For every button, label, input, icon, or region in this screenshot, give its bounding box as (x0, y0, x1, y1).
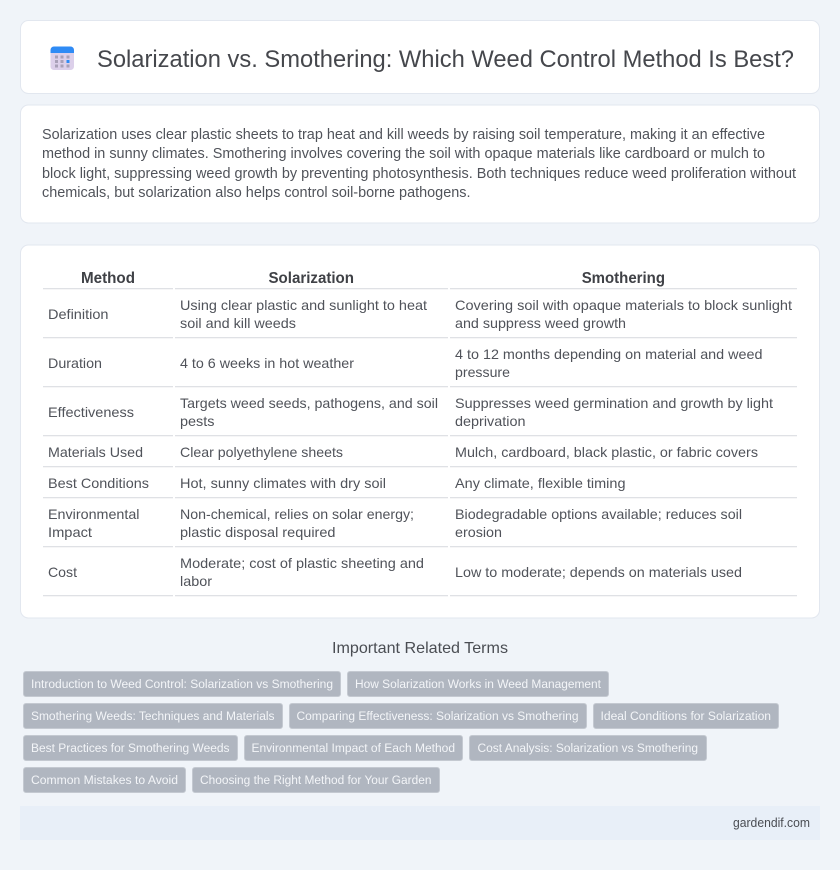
related terms tags (24, 672, 778, 792)
tag (290, 704, 586, 728)
row: environmental impact: Impact (48, 524, 92, 540)
row: environmental impact: plastic disposal required (180, 524, 336, 540)
row: best conditions (43, 475, 797, 498)
row: effectiveness: deprivation (455, 413, 526, 429)
row: duration: pressure (455, 364, 510, 380)
row: materials used: Mulch, cardboard, black plastic, or fabric covers (455, 444, 758, 460)
footer band (20, 806, 820, 840)
tag: Introduction to Weed Control: Solarization vs Smothering (31, 677, 333, 691)
tag (24, 672, 340, 696)
row: cost: Moderate; cost of plastic sheeting and (180, 555, 424, 571)
row: definition: soil and kill weeds (180, 315, 296, 331)
tag: Choosing the Right Method for Your Garden (200, 773, 432, 787)
tag (594, 704, 778, 728)
tag (470, 736, 706, 760)
row: effectiveness: Effectiveness (48, 404, 134, 420)
intro paragraph: chemicals, but solarization also helps control soil-borne pathogens. (42, 185, 470, 201)
row: environmental impact: erosion (455, 524, 502, 540)
tag: Best Practices for Smothering Weeds (31, 741, 230, 755)
tag: Common Mistakes to Avoid (31, 773, 178, 787)
row: best conditions: Best Conditions (48, 475, 149, 491)
icon: calendar (50, 46, 74, 70)
row: duration (43, 346, 797, 387)
tag (24, 704, 282, 728)
tag: Environmental Impact of Each Method (252, 741, 455, 755)
table header row: Solarization (268, 270, 354, 287)
row: cost: labor (180, 573, 212, 589)
row: definition (43, 297, 797, 338)
row: duration: Duration (48, 355, 102, 371)
intro paragraph: Solarization uses clear plastic sheets to trap heat and kill weeds by raising soil temperature, making it an effective (42, 127, 765, 143)
row: duration: 4 to 12 months depending on material and weed (455, 346, 762, 362)
row: materials used (43, 444, 797, 467)
panel: comparison table (20, 245, 820, 618)
row: environmental impact: Environmental (48, 506, 140, 522)
panel: title header (20, 20, 820, 94)
tag (192, 768, 440, 792)
footer source: gardendif.com (733, 815, 810, 830)
row: definition: Using clear plastic and sunlight to heat (180, 297, 427, 313)
table header row: Smothering (582, 270, 665, 287)
panel: introduction (20, 105, 820, 223)
tag: Comparing Effectiveness: Solarization vs Smothering (296, 709, 578, 723)
table header row (43, 270, 797, 289)
row: materials used: Materials Used (48, 444, 143, 460)
row: definition: Definition (48, 306, 108, 322)
row: environmental impact: Biodegradable options available; reduces soil (455, 506, 742, 522)
tag (24, 736, 238, 760)
row: duration: 4 to 6 weeks in hot weather (180, 355, 354, 371)
tag (244, 736, 462, 760)
intro paragraph: method in sunny climates. Smothering involves covering the soil with opaque materials like cardboard or mulch to (42, 146, 765, 162)
tag (348, 672, 608, 696)
row: effectiveness: Suppresses weed germination and growth by light (455, 395, 773, 411)
row: cost: Low to moderate; depends on materials used (455, 564, 742, 580)
heading: important related terms: Important Related Terms (332, 640, 508, 657)
table header row: Method (81, 270, 135, 287)
row: cost: Cost (48, 564, 77, 580)
row: environmental impact (43, 506, 797, 547)
row: definition: and suppress weed growth (455, 315, 626, 331)
row: best conditions: Hot, sunny climates with dry soil (180, 475, 386, 491)
tag: Ideal Conditions for Solarization (600, 709, 771, 723)
intro paragraph (42, 127, 796, 201)
row: cost (43, 555, 797, 596)
row: best conditions: Any climate, flexible timing (455, 475, 626, 491)
row: materials used: Clear polyethylene sheets (180, 444, 343, 460)
row: environmental impact: Non-chemical, relies on solar energy; (180, 506, 414, 522)
row: definition: Covering soil with opaque materials to block sunlight (455, 297, 792, 313)
title: Solarization vs. Smothering: Which Weed Control Method Is Best? (97, 46, 794, 73)
tag: Smothering Weeds: Techniques and Materials (31, 709, 274, 723)
tag: How Solarization Works in Weed Management (355, 677, 602, 691)
row: effectiveness (43, 395, 797, 436)
row: effectiveness: pests (180, 413, 214, 429)
tag (24, 768, 186, 792)
intro paragraph: block light, suppressing weed growth by preventing photosynthesis. Both techniques reduce weed proliferation without (42, 166, 796, 182)
row: effectiveness: Targets weed seeds, pathogens, and soil (180, 395, 438, 411)
tag: Cost Analysis: Solarization vs Smothering (478, 741, 698, 755)
